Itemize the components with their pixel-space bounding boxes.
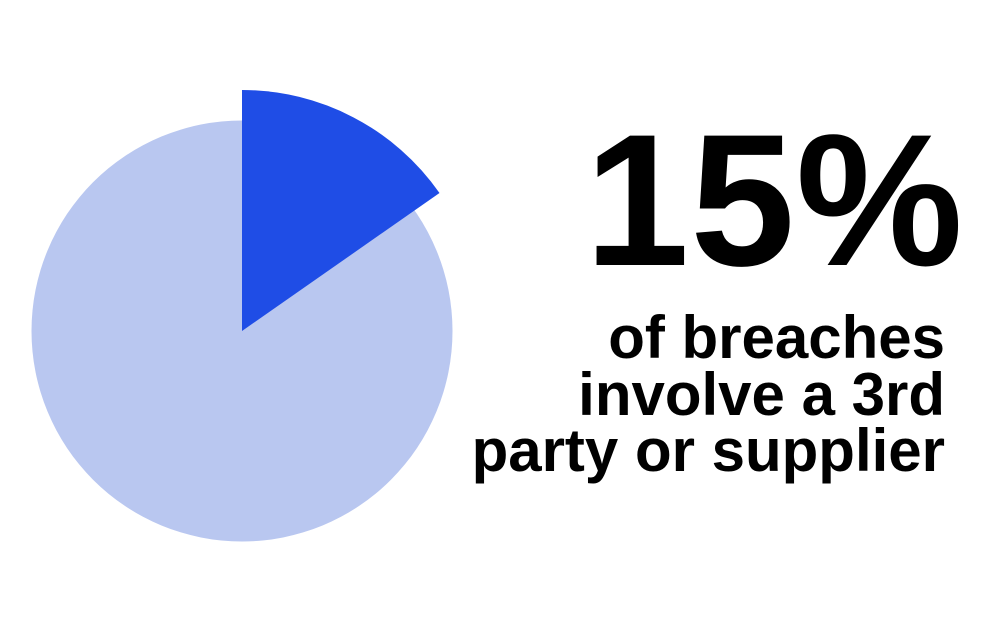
caption: of breaches	[608, 304, 945, 371]
headline figure: 15%	[585, 95, 964, 305]
pie slice: 15%	[242, 90, 440, 331]
caption: involve a 3rd	[578, 360, 945, 428]
pie base: remaining share	[32, 120, 452, 542]
caption: party or supplier	[472, 417, 945, 484]
caption	[472, 304, 945, 484]
